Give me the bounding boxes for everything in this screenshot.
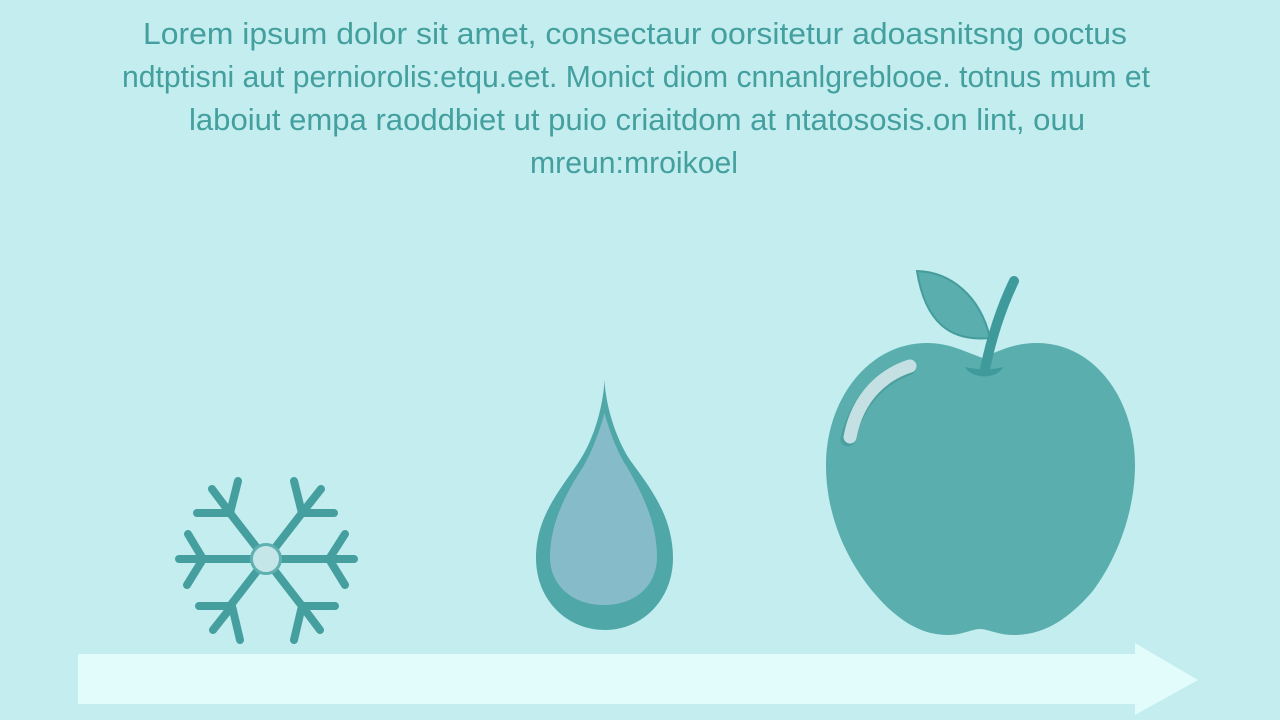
leaf [917, 271, 990, 338]
text block: intro paragraph: mreun:mroikoel [530, 145, 738, 180]
text block: intro paragraph [122, 16, 1150, 180]
text block: intro paragraph: Lorem ipsum dolor sit amet, consectaur oorsitetur adoasnitsng ooctus [143, 16, 1127, 51]
icon: water drop [536, 380, 673, 630]
apple body [826, 343, 1135, 635]
stem [985, 281, 1014, 369]
highlight [848, 368, 908, 439]
text block: intro paragraph: laboiut empa raoddbiet ut puio criaitdom at ntatososis.on lint, ouu [189, 102, 1085, 137]
stem base [965, 367, 1003, 376]
icon: snowflake [179, 481, 354, 640]
arrow: timeline pointing right [78, 643, 1198, 715]
icon: apple [826, 271, 1135, 635]
text block: intro paragraph: ndtptisni aut perniorolis:etqu.eet. Monict diom cnnanlgreblooe. totnus mum et [122, 59, 1150, 94]
